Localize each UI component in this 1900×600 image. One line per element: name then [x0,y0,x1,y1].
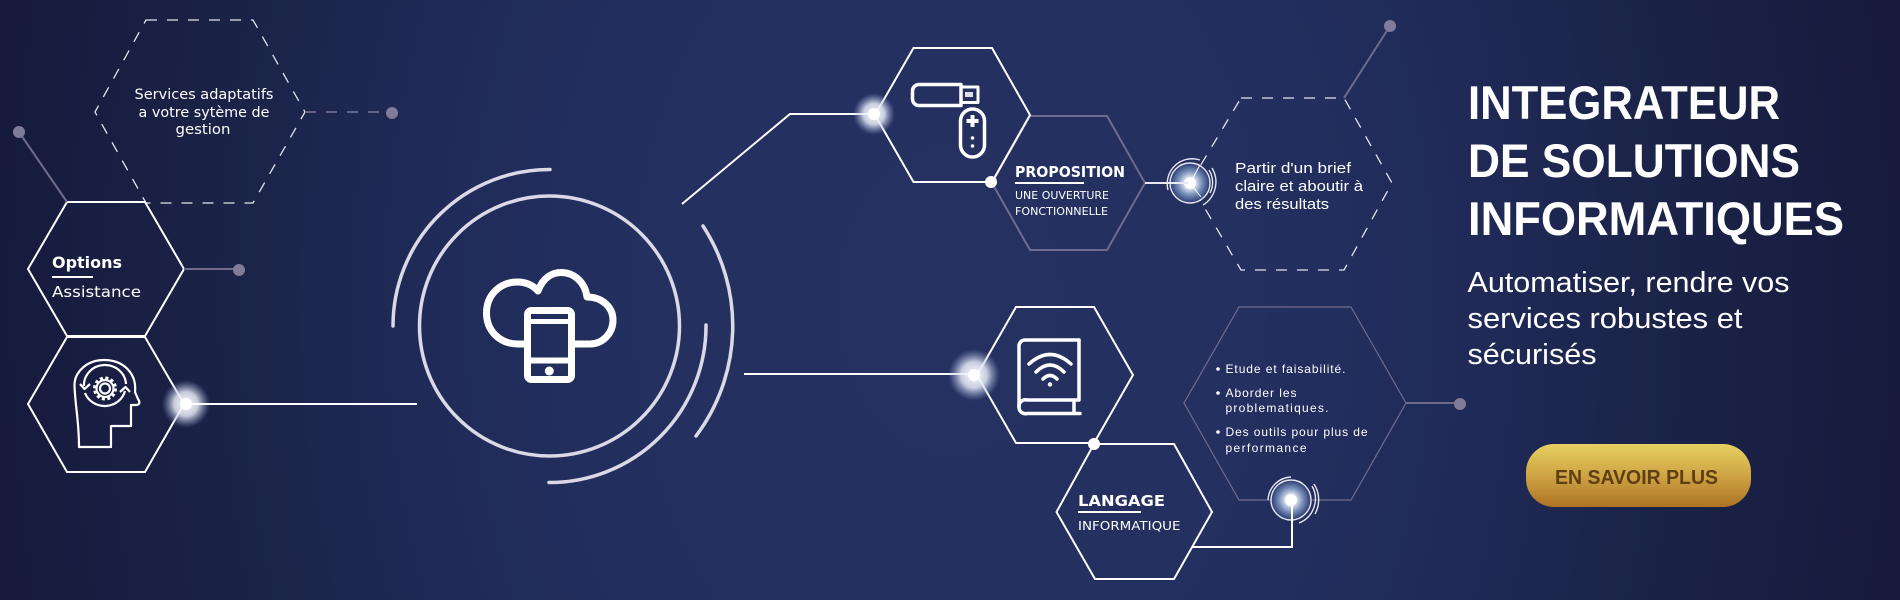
text: une ouverture fonctionnelle [1015,190,1109,218]
title: INFORMATIQUES [1468,192,1844,245]
text: services adaptatifs: gestion [176,122,230,138]
text: services adaptatifs: a votre sytème de [138,105,270,121]
button: en savoir plus [1526,444,1751,507]
text: une ouverture fonctionnelle: FONCTIONNELLE [1015,206,1108,218]
heading: proposition: PROPOSITION [1015,163,1125,181]
subtitle [1468,267,1790,371]
title: INTEGRATEUR [1468,76,1780,129]
icon: head with gear [74,360,139,447]
text: bullet list: Etude et faisabilité. [1226,362,1346,376]
text: assistance: Assistance [52,283,141,301]
panel: options hexagon [13,126,245,336]
panel: langage hexagon [1056,438,1212,579]
connector: langage to target [1192,501,1292,547]
icon: wifi book [1019,340,1080,414]
node: usb to proposition joint [985,176,997,188]
arc: far right [696,226,733,436]
connector: brief top-right dot [1344,20,1396,98]
target: brief node [1167,159,1216,205]
text: bullet list [1216,362,1368,455]
subtitle: services robustes et [1468,303,1742,335]
connector: options right dot [184,264,245,276]
text: services adaptatifs [134,87,274,138]
panel: brief dashed hexagon [1145,20,1396,270]
arc: outer lower-right [549,325,706,483]
panel: usb hexagon [853,48,1030,188]
divider: langage underline [1078,511,1141,513]
heading: langage: LANGAGE [1078,492,1165,510]
text: partir d'un brief [1235,160,1364,213]
connector: bullet hexagon dot [1406,398,1466,410]
text: bullet list: problematiques. [1226,401,1328,415]
title [1468,76,1844,245]
glow: head hexagon node [162,380,210,428]
connector: proposition to target [1145,182,1188,184]
text: bullet list: performance [1226,441,1307,455]
panel: bullet list hexagon [1184,307,1466,547]
connector: circle to usb hexagon [682,114,874,204]
text: bullet list: Aborder les [1226,386,1296,400]
glow: usb hexagon node [853,93,895,135]
connector: options top-left dot [13,126,67,202]
glow: book hexagon node [948,349,1000,401]
button: en savoir plus: EN SAVOIR PLUS [1555,466,1718,489]
icon: cloud and phone [486,272,613,380]
text: partir d'un brief: des résultats [1235,196,1329,213]
divider: options underline [52,276,93,278]
text: services adaptatifs: Services adaptatifs [134,87,274,103]
text: bullet list: Des outils pour plus de [1226,425,1368,439]
connector: services dot [305,107,398,119]
subtitle: Automatiser, rendre vos [1468,267,1790,299]
icon: usb key and controller [912,84,984,157]
panel: book hexagon [948,307,1133,443]
text: une ouverture fonctionnelle: UNE OUVERTURE [1015,190,1109,202]
text: informatique: INFORMATIQUE [1078,518,1181,533]
panel: head gear hexagon [28,337,210,472]
target: bullet hexagon node [1268,477,1319,523]
heading: options: Options [52,253,122,272]
node: book to langage joint [1088,438,1100,450]
arc: outer upper-left [393,169,550,326]
panel: proposition hexagon [992,116,1145,250]
divider: proposition underline [1015,182,1084,184]
panel: central cloud circle [393,169,733,483]
title: DE SOLUTIONS [1468,134,1800,187]
panel: services adaptatifs dashed hexagon [95,20,398,203]
text: partir d'un brief: claire et aboutir à [1235,178,1364,195]
subtitle: sécurisés [1468,339,1596,371]
connector: head to main circle [180,398,417,410]
connector: circle to book hexagon [744,373,974,375]
text: partir d'un brief: Partir d'un brief [1235,160,1352,177]
